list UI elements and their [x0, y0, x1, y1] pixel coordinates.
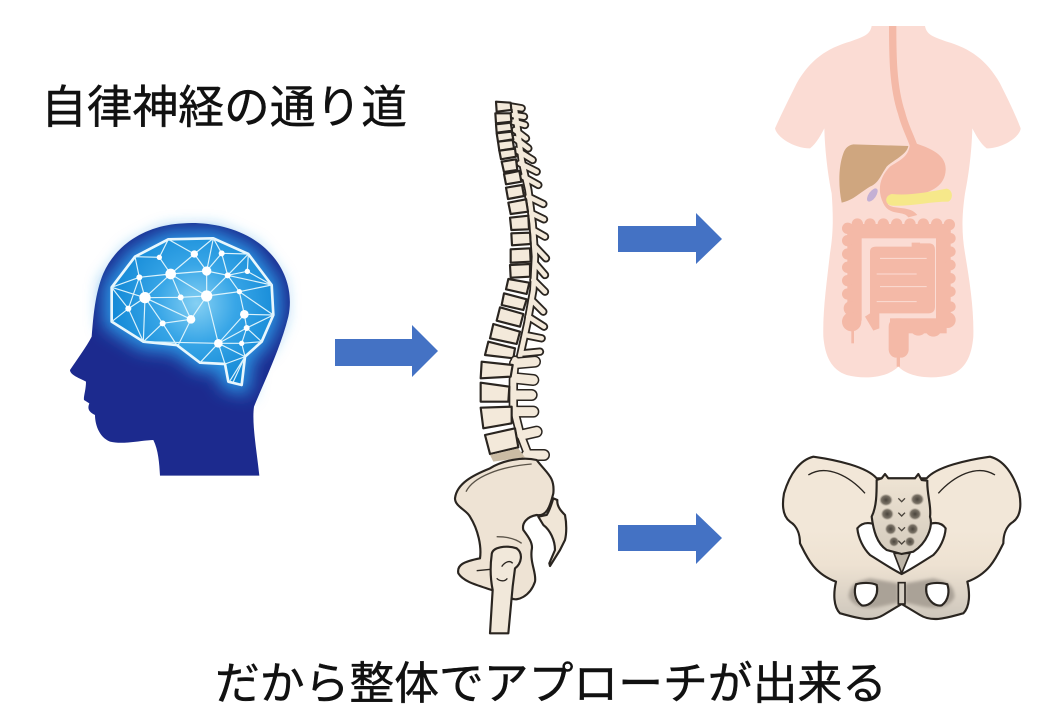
neural nodes — [125, 250, 250, 348]
sacrum — [872, 474, 931, 554]
obturator foramina — [855, 583, 877, 606]
pubic shading — [849, 578, 898, 608]
lumbar vertebrae — [481, 362, 518, 454]
sacral foramina — [879, 493, 924, 547]
arrow: spine to organs — [618, 213, 722, 264]
upper spine — [485, 102, 546, 358]
coccyx — [894, 553, 910, 573]
hip bones — [783, 457, 1020, 619]
vertebral bodies — [485, 102, 531, 358]
arrow: spine to pelvis — [618, 513, 722, 564]
illustration: torso with digestive organs — [775, 26, 1021, 377]
wing contour lines — [808, 471, 995, 493]
illustration: pelvis front view — [783, 457, 1020, 619]
brain glow — [112, 238, 273, 385]
liver — [839, 144, 908, 203]
bottom caption: だから整体でアプローチが出来る — [215, 660, 887, 709]
title: 自律神経の通り道 — [41, 82, 407, 133]
brain outline — [112, 238, 273, 385]
small intestine — [865, 243, 935, 331]
neural network lines — [112, 238, 273, 382]
pancreas — [886, 189, 952, 206]
sacrum side view — [538, 498, 566, 566]
illustration: spine and side pelvis — [455, 102, 566, 633]
spinal processes — [512, 107, 546, 353]
arrow: brain to spine — [335, 325, 438, 377]
head silhouette — [70, 223, 290, 476]
icon: head with glowing neural brain — [70, 223, 290, 476]
esophagus — [893, 26, 914, 147]
lumbosacral disc — [490, 448, 525, 462]
torso silhouette — [775, 26, 1021, 377]
femur — [490, 547, 521, 633]
large intestine — [842, 218, 956, 367]
lower spine — [455, 360, 566, 633]
lumbar processes — [515, 362, 544, 455]
gallbladder — [865, 187, 880, 203]
stomach — [880, 142, 946, 217]
ilium side view — [455, 459, 554, 599]
pubic symphysis — [898, 583, 905, 604]
pelvic opening — [857, 523, 946, 574]
